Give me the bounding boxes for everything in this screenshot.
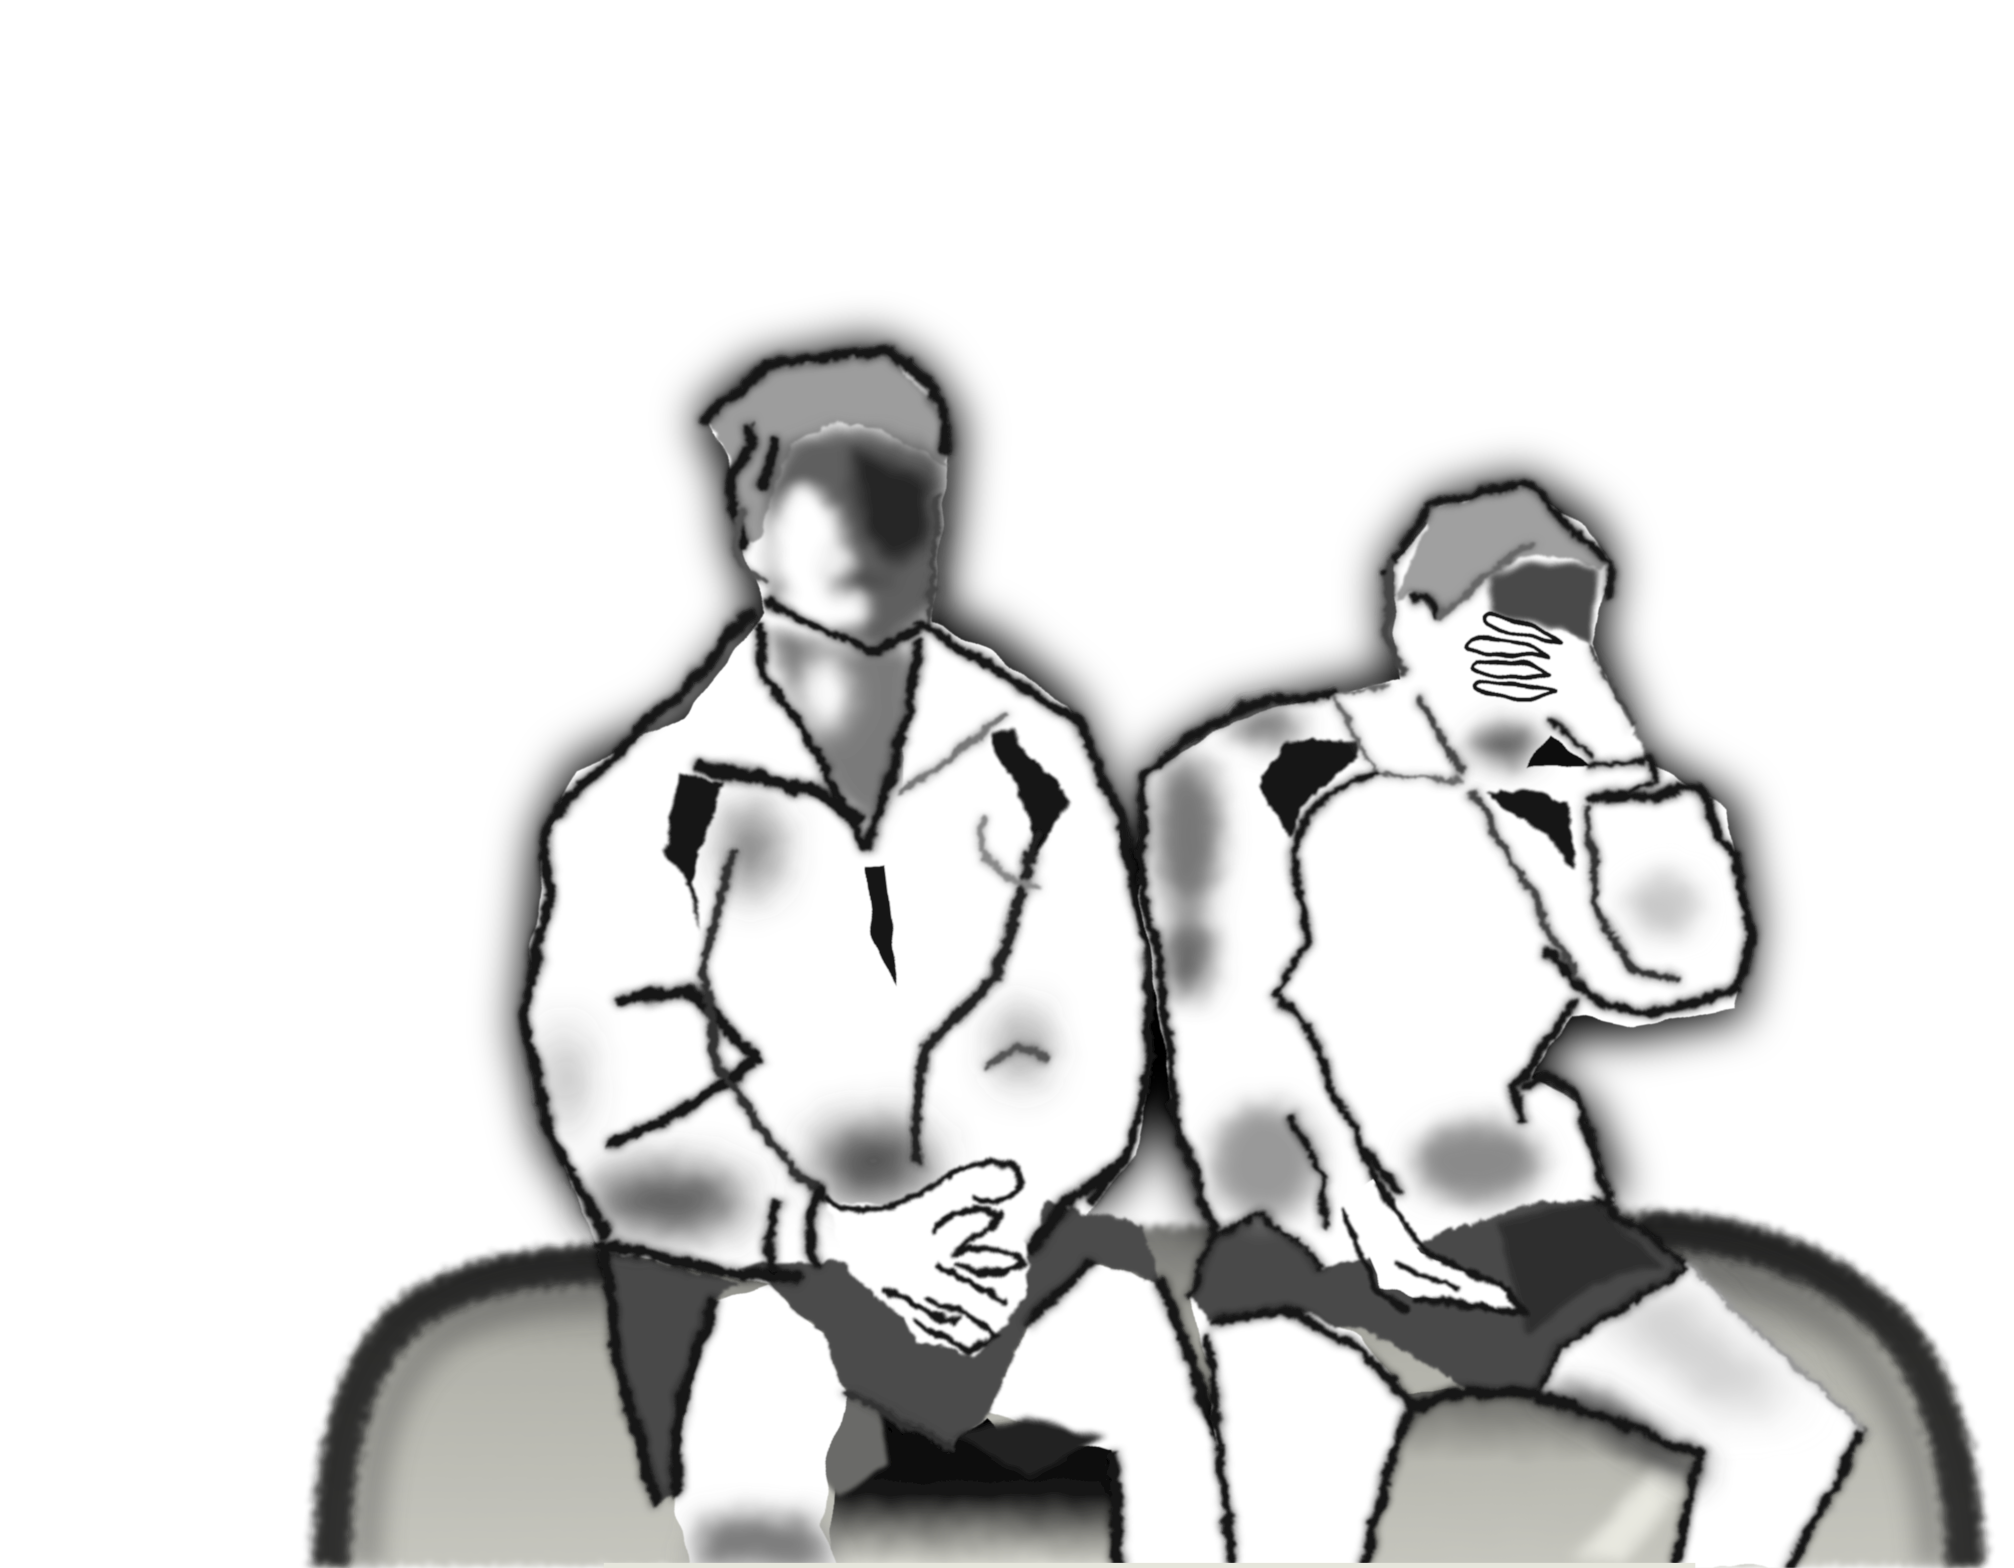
left man right thigh and shin (989, 1265, 1265, 1568)
man on right (1141, 483, 1865, 1568)
left man rounded cushion fold (818, 1384, 889, 1497)
left man left shorts strip (599, 1248, 739, 1505)
left man left thigh (674, 1284, 848, 1568)
man on left (524, 349, 1265, 1568)
left man centre shorts (739, 1201, 1162, 1449)
right man sofa gap between legs (1364, 1391, 1699, 1568)
right man right leg (1535, 1265, 1865, 1568)
right man gap behind hand (1528, 736, 1591, 767)
right man shorts (1188, 1197, 1689, 1393)
left man torso silhouette (524, 349, 1150, 1284)
left man wristband (768, 1192, 820, 1271)
right man shading (1155, 711, 1699, 1220)
left man hair (709, 353, 948, 542)
left man black shoulder patches (663, 774, 723, 931)
right man silhouette (1141, 485, 1749, 1284)
left man neck highlight (799, 655, 850, 732)
left man face shading (766, 430, 948, 649)
right man black shoulder patches (1259, 740, 1359, 837)
left man shin shading (687, 1515, 837, 1568)
sofa (319, 1215, 1980, 1568)
sofa body (319, 1215, 1980, 1568)
sofa charcoal outline (332, 1230, 1965, 1568)
right man right leg shading (1593, 1284, 1798, 1413)
right man gap highlight (1573, 1451, 1695, 1562)
left man torso shading (552, 804, 1037, 1232)
right man dark forehead (1489, 563, 1598, 646)
left man neck shading (766, 629, 915, 835)
left man zipper (866, 867, 899, 989)
left man outline (524, 351, 1265, 1568)
shadow beneath left man (828, 1387, 1117, 1568)
right man knee shading (1535, 1387, 1708, 1490)
left man collar flaps (700, 623, 1040, 796)
floor strip (604, 1563, 1695, 1568)
right man left leg (1188, 1297, 1413, 1568)
left man clasped hands (825, 1162, 1028, 1355)
right man fingers over face (1467, 615, 1559, 697)
right man hair (1395, 485, 1605, 616)
right man outline (1141, 483, 1865, 1568)
left man dark crease tip (957, 1419, 1105, 1477)
right man hand back (1535, 629, 1648, 765)
sofa inner soft shadow (366, 1265, 1933, 1568)
halo shadow around figures (527, 349, 1747, 1220)
right man lower hand (1342, 1181, 1523, 1312)
right man darker shorts panel (1496, 1201, 1663, 1336)
